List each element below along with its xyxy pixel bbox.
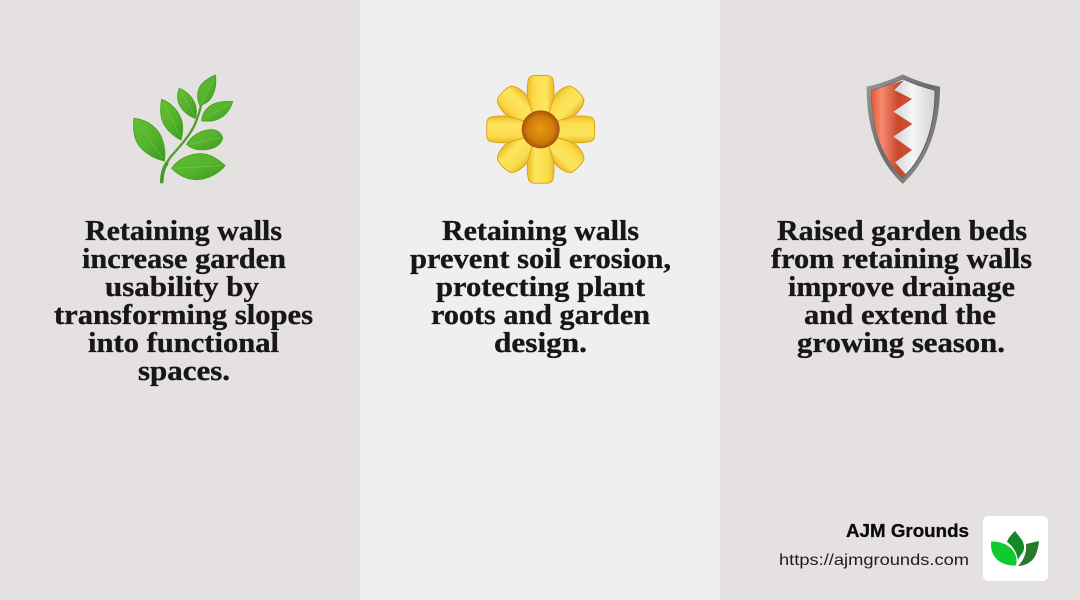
heading: erosion text: roots and garden <box>431 299 650 331</box>
heading: usability text: usability by <box>105 271 260 303</box>
heading: raised beds text: from retaining walls <box>771 243 1032 275</box>
heading: usability text: Retaining walls <box>85 215 282 247</box>
brand url: https://ajmgrounds.com <box>779 552 969 569</box>
heading: raised beds text: and extend the <box>804 299 996 331</box>
heading: erosion text: protecting plant <box>436 271 645 303</box>
heading: usability text: transforming slopes <box>54 299 313 331</box>
heading: raised beds text: improve drainage <box>788 271 1015 303</box>
icon: green leafy branch <box>134 75 233 182</box>
heading: usability text <box>54 215 313 387</box>
heading: erosion text: Retaining walls <box>442 215 639 247</box>
heading: usability text: spaces. <box>138 355 230 387</box>
icon: red and silver shield <box>867 74 940 184</box>
heading: erosion text: prevent soil erosion, <box>410 243 671 275</box>
panel: right column <box>720 0 1080 600</box>
heading: raised beds text: Raised garden beds <box>777 215 1027 247</box>
heading: usability text: increase garden <box>82 243 286 275</box>
heading: erosion text: design. <box>494 327 587 359</box>
brand name: AJM Grounds <box>846 521 969 541</box>
panel: center column <box>360 0 720 600</box>
icon: yellow flower <box>487 75 595 183</box>
panel: left column <box>0 0 360 600</box>
heading: raised beds text <box>771 215 1032 359</box>
heading: usability text: into functional <box>88 327 279 359</box>
logo: white tile with leaves <box>983 516 1048 581</box>
heading: raised beds text: growing season. <box>797 327 1005 359</box>
heading: erosion text <box>410 215 671 359</box>
